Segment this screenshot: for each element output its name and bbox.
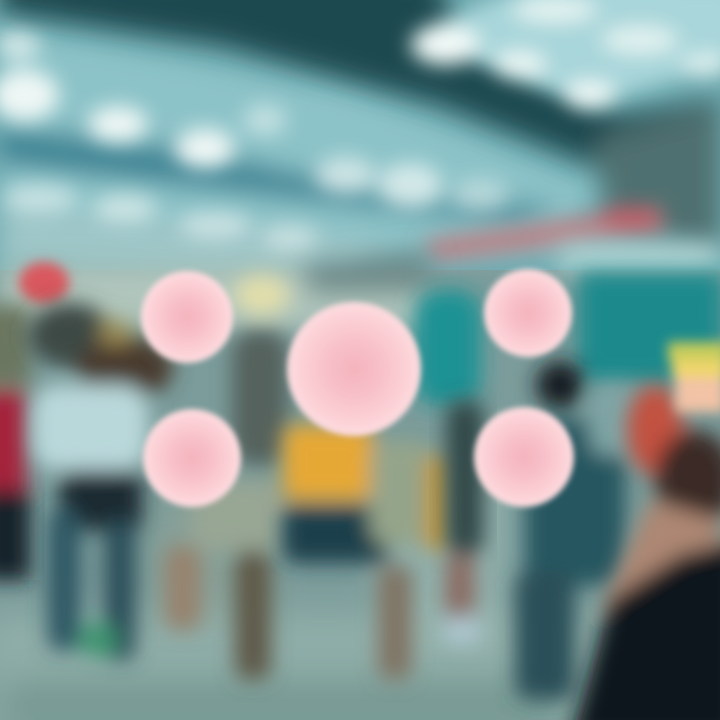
circle: upper right [484,269,572,357]
red banner [425,205,665,262]
crowd [0,275,720,720]
circle: lower left [143,409,241,507]
dark ceiling beam [0,0,720,250]
person 1: far left, red shirt [0,305,30,580]
circle: upper left [141,271,233,363]
yellow and green sign [668,342,720,412]
person 6: teal right [515,361,640,700]
pink circles [141,269,574,507]
lower floor [0,470,620,720]
upper right skylight [411,0,720,109]
person 3: grey center-left [165,275,290,680]
teal pillars [415,272,720,405]
ceiling [0,0,720,280]
circle: center large [287,302,421,436]
mid band wall [0,245,720,330]
person 5: dark center-right [442,400,484,644]
foreground person at right [570,385,720,720]
person 2: white shirt [28,303,173,660]
circle: lower right [474,407,574,507]
ceiling lights [0,29,508,251]
person 4: yellow shirt [283,425,449,680]
red ball upper left [19,262,69,304]
